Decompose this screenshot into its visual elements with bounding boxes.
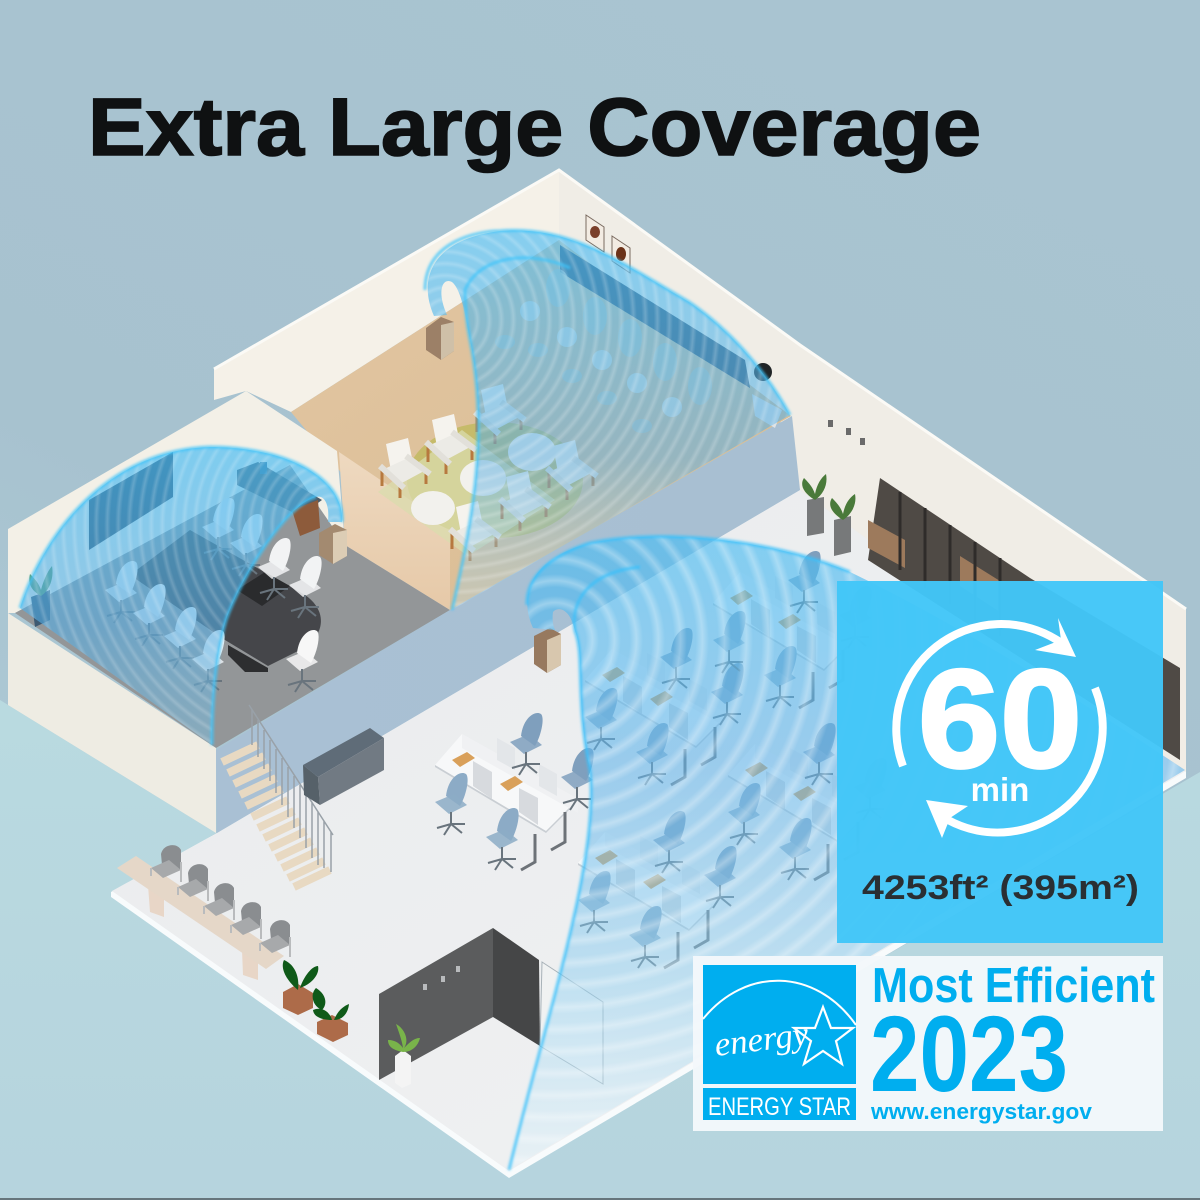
upper room furniture — [378, 215, 782, 561]
shelving unit — [868, 478, 1180, 760]
energy star logo: ENERGY STAR — [708, 1093, 851, 1121]
corner plant — [29, 566, 53, 627]
airflow: meeting room — [20, 447, 342, 745]
wall bench — [560, 245, 750, 388]
energy star logo — [703, 965, 856, 1121]
energy star panel — [693, 956, 1163, 1131]
white chairs — [105, 498, 322, 692]
right long wall — [559, 170, 1186, 772]
vase — [260, 462, 267, 474]
reflective ground — [0, 700, 1200, 1198]
round rug — [407, 422, 583, 538]
coverage panel — [837, 581, 1163, 943]
square rug — [378, 430, 555, 556]
staircase — [222, 705, 333, 887]
icon: 60 minute cycle arrows — [896, 618, 1103, 838]
number 60: 60 — [918, 640, 1082, 797]
title: Extra Large Coverage — [88, 82, 981, 173]
coffee tables — [411, 433, 556, 525]
panel background — [837, 581, 1163, 943]
tables row — [520, 301, 682, 417]
meeting room furniture — [29, 452, 322, 692]
area text: 4253ft² (395m²) — [862, 869, 1139, 907]
dark corner wall — [379, 928, 540, 1080]
reception bench — [117, 845, 290, 980]
air purifier: meeting room — [319, 524, 347, 564]
meeting room back wall — [8, 391, 345, 613]
table recess — [237, 572, 290, 606]
handrail — [249, 705, 333, 872]
conference table — [130, 530, 321, 666]
seats row — [495, 269, 712, 433]
sideboard — [237, 462, 322, 516]
glass panel — [540, 962, 603, 1084]
wall screen — [89, 452, 173, 550]
wood partition — [339, 452, 450, 610]
corner desk — [752, 394, 782, 428]
potted plants — [283, 960, 349, 1042]
min label: min — [971, 771, 1029, 808]
panel background — [693, 956, 1163, 1131]
armchairs — [380, 438, 430, 498]
pedestal plant — [388, 1024, 420, 1088]
wood floor — [291, 240, 791, 610]
most efficient heading: Most Efficient — [872, 959, 1155, 1013]
air purifier: open office — [534, 628, 561, 673]
stair treads — [222, 745, 330, 887]
meeting room front wall — [8, 613, 216, 833]
table base — [228, 645, 268, 672]
wall hooks — [828, 420, 865, 445]
carpet floor — [15, 465, 450, 748]
wood pedestal — [292, 500, 320, 536]
grey cabinet — [303, 728, 384, 805]
open office desks — [435, 551, 887, 968]
black lamp — [754, 363, 772, 381]
bottom edge line — [0, 1198, 1200, 1200]
year: 2023 — [870, 993, 1068, 1114]
upper room back wall — [214, 170, 559, 412]
air purifier: upper room — [426, 317, 454, 360]
energy star logo: energy — [712, 1016, 811, 1064]
plants on pedestals — [802, 474, 855, 556]
paintings — [586, 215, 630, 273]
central blue wall — [216, 416, 800, 833]
airflow: open office — [509, 537, 1185, 1170]
white ground floor — [111, 490, 1186, 1178]
website: www.energystar.gov — [870, 1099, 1093, 1124]
airflow: upper room — [425, 230, 790, 610]
wall top edge — [214, 170, 1186, 609]
